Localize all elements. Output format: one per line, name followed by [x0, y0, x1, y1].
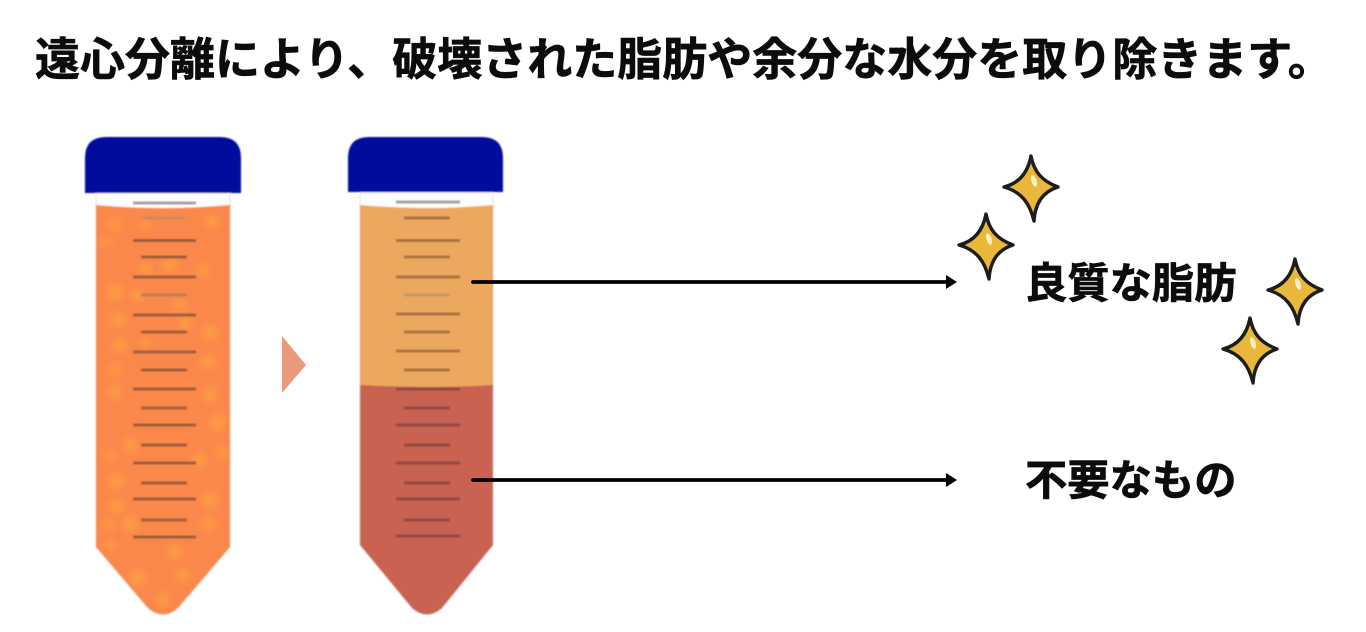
liquid: mixed orange	[96, 205, 230, 614]
arrow between tubes	[282, 336, 306, 393]
arrow: to good fat	[473, 275, 957, 289]
graduation lines	[396, 202, 460, 536]
tube: after centrifuge	[348, 137, 503, 614]
label: waste: 不要なもの	[1025, 457, 1236, 504]
layer: good fat	[360, 205, 493, 388]
cap	[85, 137, 241, 193]
layer: waste	[360, 385, 493, 614]
tube: before centrifuge	[85, 137, 241, 614]
arrow: to waste	[473, 473, 957, 487]
icon: sparkle 1	[1004, 156, 1058, 221]
icon: sparkle 2	[959, 214, 1013, 279]
graduation lines	[133, 203, 196, 537]
icon: sparkle 4	[1223, 318, 1277, 383]
label: good fat: 良質な脂肪	[1025, 260, 1236, 307]
diagram	[84, 136, 1324, 616]
title: 遠心分離により、破壊された脂肪や余分な水分を取り除きます。	[35, 34, 1333, 85]
icon: sparkle 3	[1268, 259, 1322, 324]
cap	[348, 137, 503, 192]
